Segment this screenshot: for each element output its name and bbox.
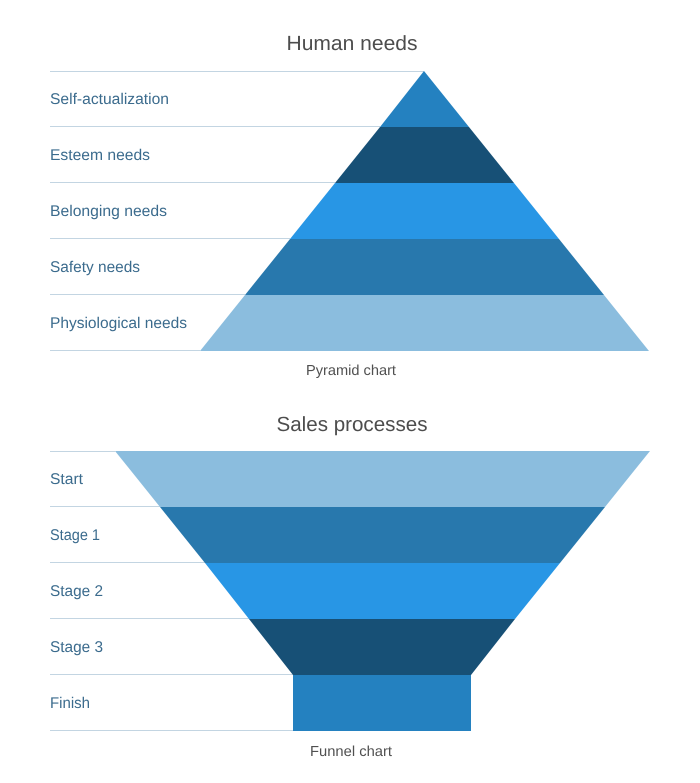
label: Start: Start xyxy=(50,471,84,488)
pyramid tier: esteem needs xyxy=(335,127,514,183)
title: Human needs: Human needs xyxy=(286,32,418,55)
pyramid tier: belonging needs xyxy=(290,183,559,239)
funnel tier: finish xyxy=(293,675,471,731)
funnel tier: stage 3 xyxy=(249,619,515,675)
label: Stage 2: Stage 2 xyxy=(50,583,103,600)
pyramid chart xyxy=(50,71,649,351)
pyramid tier: physiological needs xyxy=(200,295,649,351)
label: Safety needs: Safety needs xyxy=(50,259,140,276)
caption: Pyramid chart: Pyramid chart xyxy=(306,363,396,379)
funnel tier: stage 2 xyxy=(205,563,560,619)
pyramid tier: self-actualization xyxy=(380,71,469,127)
title: Sales processes: Sales processes xyxy=(276,413,428,436)
pyramid tier: safety needs xyxy=(245,239,604,295)
label: Physiological needs: Physiological needs xyxy=(50,315,187,332)
label: Stage 3: Stage 3 xyxy=(50,639,103,656)
funnel tier: start xyxy=(115,451,650,507)
funnel tier: stage 1 xyxy=(160,507,605,563)
funnel chart xyxy=(50,451,650,731)
label: Self-actualization: Self-actualization xyxy=(50,91,169,108)
label: Esteem needs: Esteem needs xyxy=(50,147,150,164)
label: Belonging needs: Belonging needs xyxy=(50,203,167,220)
label: Stage 1: Stage 1 xyxy=(50,527,100,544)
label: Finish: Finish xyxy=(50,695,90,712)
caption: Funnel chart: Funnel chart xyxy=(310,744,392,760)
